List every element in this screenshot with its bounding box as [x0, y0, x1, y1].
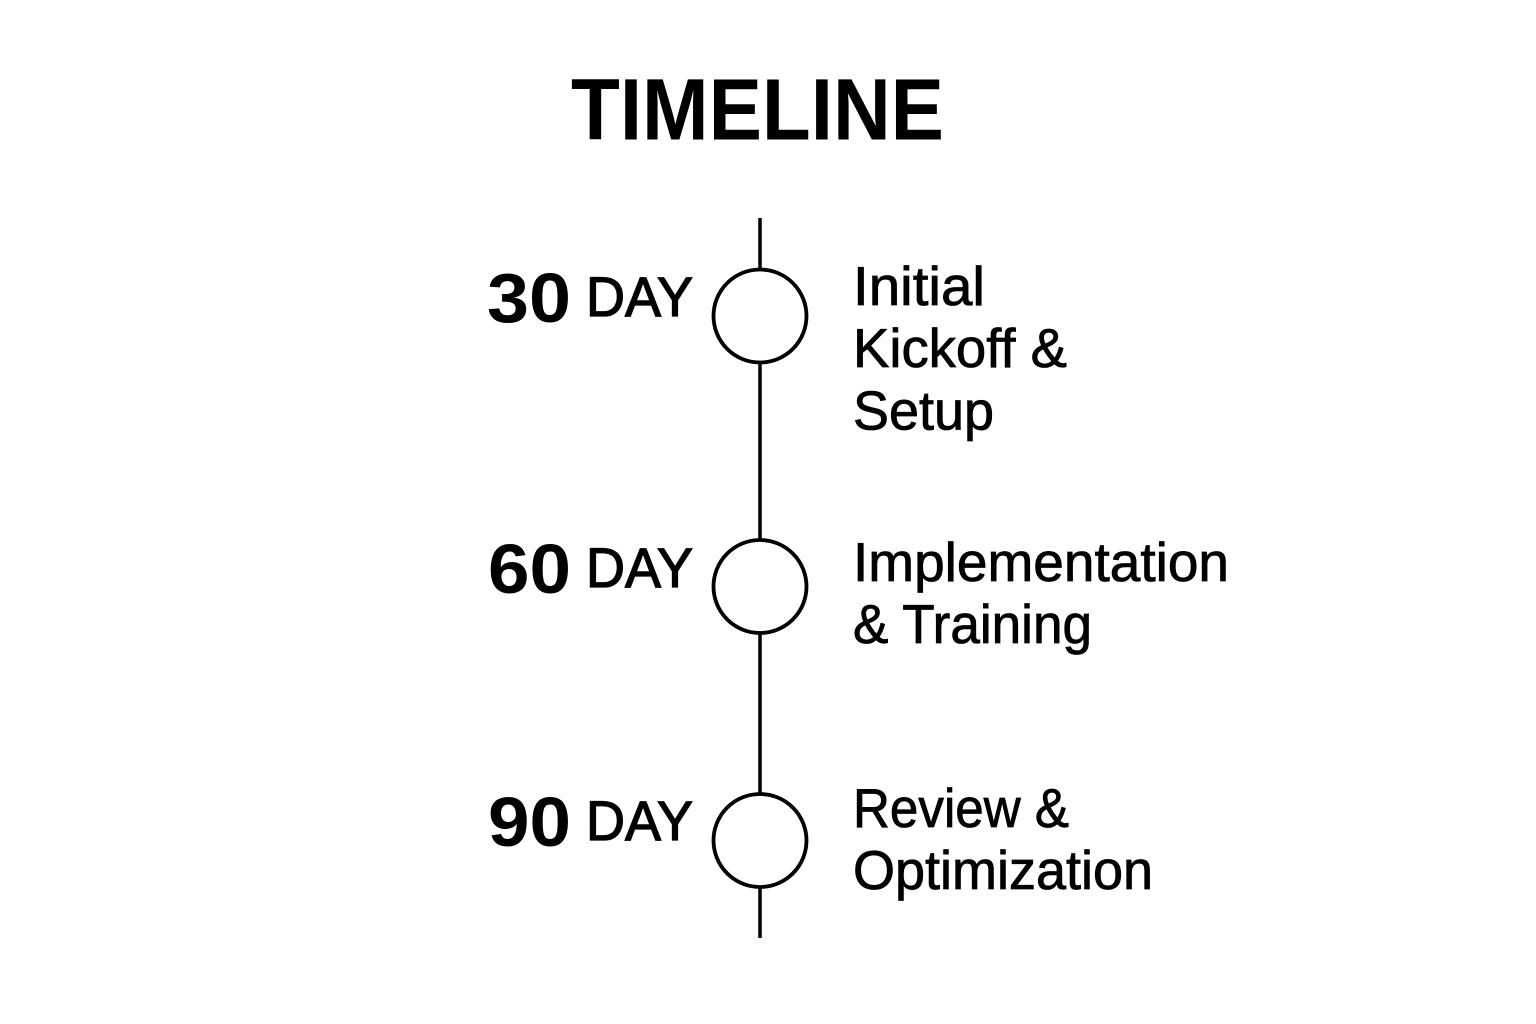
- circle marker 60: [714, 540, 806, 633]
- day label 30: DAY: [586, 265, 693, 328]
- description 60: Implementation: [853, 531, 1229, 593]
- number 90: 90: [488, 783, 571, 861]
- milestone: 90 day: [488, 777, 1153, 901]
- circle marker 30: [714, 270, 806, 362]
- description 30: Kickoff &: [853, 317, 1067, 379]
- milestone: 60 day: [488, 530, 1244, 655]
- number 30: 30: [487, 259, 571, 337]
- description 90: Review &: [853, 777, 1069, 839]
- description 30: Initial: [853, 255, 985, 317]
- circle marker 90: [714, 794, 806, 887]
- description 30: Setup: [853, 380, 994, 442]
- milestone: 30 day: [487, 255, 1082, 442]
- day label 90: DAY: [586, 789, 693, 852]
- description 60: & Training: [853, 593, 1092, 655]
- number 60: 60: [488, 530, 571, 608]
- title: TIMELINE: [571, 62, 944, 158]
- day label 60: DAY: [586, 536, 693, 599]
- timeline axis: [758, 218, 762, 938]
- description 90: Optimization: [853, 839, 1153, 901]
